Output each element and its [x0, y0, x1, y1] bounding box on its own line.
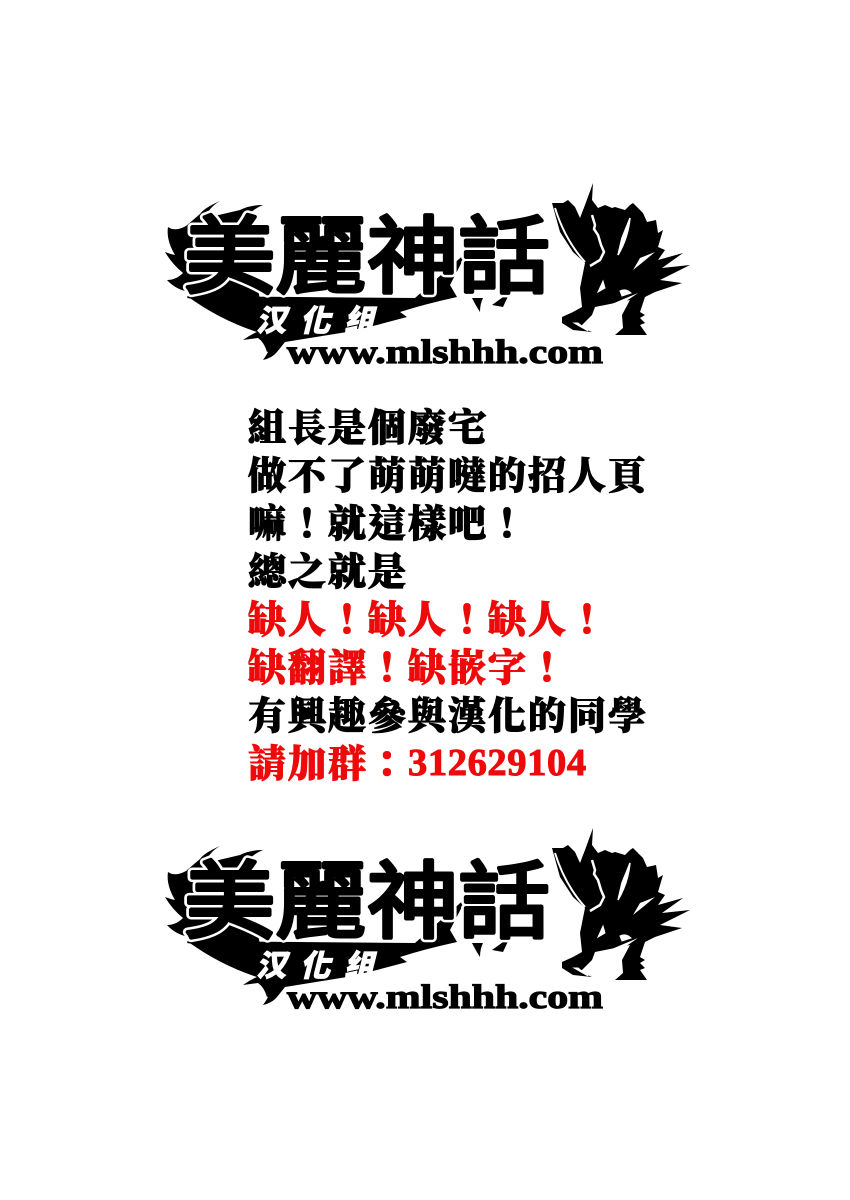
logo: bottom [165, 828, 690, 1016]
line 5: red callout: 缺人！缺人！缺人！ [248, 600, 608, 642]
title: 美麗神話 [184, 210, 550, 304]
banner [187, 897, 467, 1005]
text block: recruitment message [248, 408, 648, 786]
fangs under title [472, 937, 510, 957]
left wing [165, 201, 263, 300]
line 8: red group number: 請加群：312629104 [248, 742, 587, 786]
line 6: red callout: 缺翻譯！缺嵌字！ [248, 648, 568, 690]
left wing [165, 846, 263, 945]
line 3: 嘛！就這樣吧！ [248, 504, 528, 546]
logo: top [165, 183, 690, 371]
title: 美麗神話 [184, 210, 550, 304]
icon: dragon [552, 828, 690, 980]
title: 美麗神話 [184, 855, 550, 949]
icon: dragon [552, 183, 690, 335]
line 4: 總之就是 [248, 552, 408, 594]
line 2: 做不了萌萌噠的招人頁 [248, 456, 648, 498]
url: www.mlshhh.com [287, 979, 603, 1016]
banner [187, 252, 467, 360]
subtitle: 汉化组 [256, 305, 388, 338]
title: 美麗神話 [184, 855, 550, 949]
fangs under title [472, 292, 510, 312]
line 1: 組長是個廢宅 [248, 408, 488, 450]
subtitle: 汉化组 [256, 950, 388, 983]
line 7: 有興趣參與漢化的同學 [248, 696, 648, 738]
url: www.mlshhh.com [287, 334, 603, 371]
